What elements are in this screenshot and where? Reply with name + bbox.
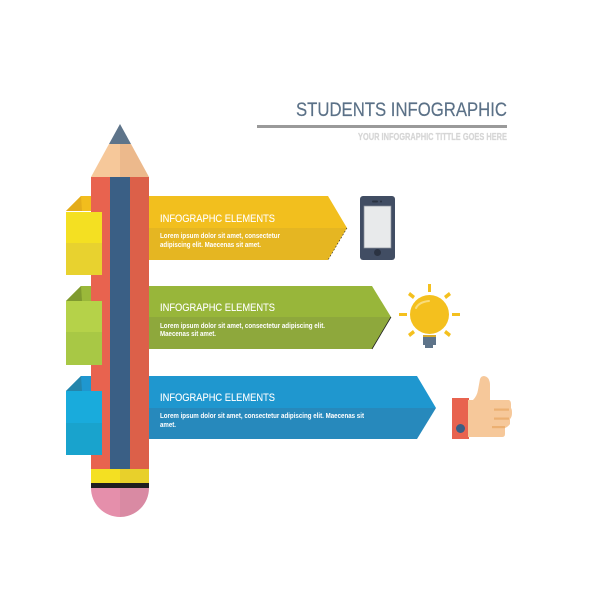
icon: light bulb — [399, 284, 460, 348]
heading: INFOGRAPHC ELEMENTS — [160, 392, 275, 404]
pencil body centre — [110, 177, 130, 469]
body text: Lorem ipsum dolor sit amet, consectetur adipiscing elit. — [160, 323, 325, 330]
pencil wood right — [120, 144, 149, 177]
pencil body left — [91, 177, 110, 469]
heading: INFOGRAPHC ELEMENTS — [160, 213, 275, 225]
panel: green arrow — [149, 286, 391, 349]
blue note — [66, 391, 102, 455]
pencil band — [91, 483, 149, 488]
rays — [399, 284, 460, 337]
pencil — [91, 124, 149, 517]
pencil lead tip — [109, 124, 131, 144]
body text: Lorem ipsum dolor sit amet, consectetur adipiscing elit. Maecenas sit — [160, 413, 365, 420]
sleeve button — [456, 424, 465, 433]
folded note back tabs — [66, 196, 91, 391]
pencil eraser — [91, 488, 120, 517]
body text: Maecenas sit amet. — [160, 331, 216, 338]
heading: INFOGRAPHC ELEMENTS — [160, 302, 275, 314]
body text: Lorem ipsum dolor sit amet, consectetur — [160, 233, 280, 240]
panel: yellow arrow — [149, 196, 347, 260]
sleeve — [452, 398, 469, 439]
body text: amet. — [160, 422, 176, 429]
body text — [160, 323, 325, 338]
header: title block — [257, 99, 507, 143]
icon: smartphone — [360, 196, 395, 260]
pencil body right — [130, 177, 149, 469]
subtitle: YOUR INFOGRAPHIC TITTLE GOES HERE — [358, 132, 507, 143]
yellow note — [66, 212, 102, 275]
pencil wood left — [91, 144, 120, 177]
bulb base — [423, 335, 436, 338]
bulb glass — [410, 295, 449, 334]
title: STUDENTS INFOGRAPHIC — [296, 99, 507, 121]
body text: adipiscing elit. Maecenas sit amet. — [160, 242, 261, 249]
pencil ferrule — [91, 469, 120, 483]
panel: blue arrow — [149, 376, 436, 439]
body text — [160, 413, 365, 429]
body text — [160, 233, 280, 249]
hand — [468, 376, 512, 437]
icon: thumbs up — [452, 376, 512, 439]
finger creases — [492, 408, 509, 428]
title rule — [257, 125, 507, 128]
bulb highlight — [416, 301, 429, 308]
green note — [66, 301, 102, 365]
